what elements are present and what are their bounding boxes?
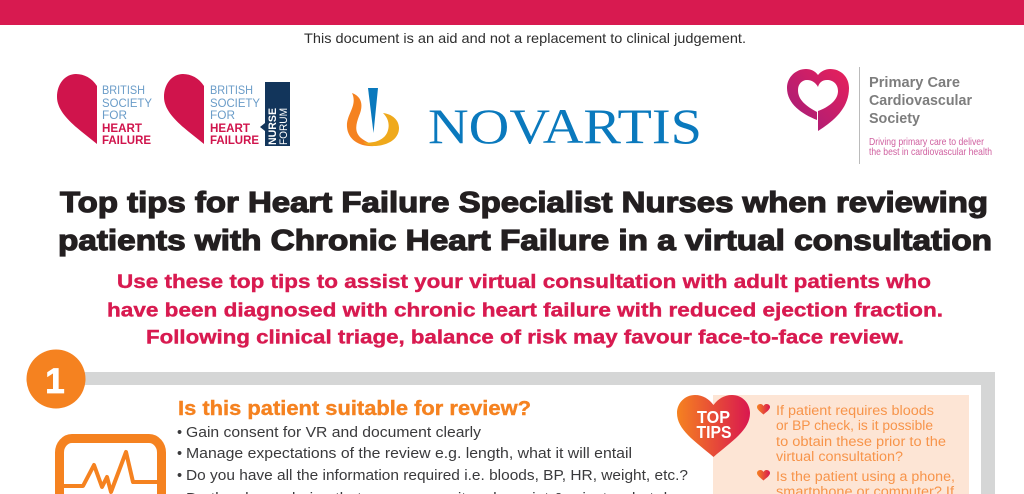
subtitle: Use these top tips to assist your virtual consultation with adult patients who xyxy=(117,271,931,293)
checklist: • xyxy=(177,468,182,484)
icon: top tips heart: TIPS xyxy=(696,422,732,442)
logo: BSH Nurse Forum: BRITISH xyxy=(210,83,253,97)
icon: top tips heart: TOP xyxy=(697,407,730,427)
logo: Primary Care Cardiovascular Society: Cardiovascular xyxy=(869,93,972,109)
panel: step 1 frame xyxy=(56,372,995,494)
checklist: Gain consent for VR and document clearly xyxy=(186,425,482,441)
checklist xyxy=(177,425,688,494)
top tips text: virtual consultation? xyxy=(776,449,903,464)
top tips text: If patient requires bloods xyxy=(776,403,934,418)
top tips text: or BP check, is it possible xyxy=(776,418,933,433)
title: patients with Chronic Heart Failure in a virtual consultation xyxy=(58,225,992,257)
step number badge: 1 xyxy=(45,362,65,401)
heading: step 1: Is this patient suitable for review? xyxy=(178,397,531,420)
logo: BSH Nurse Forum: FORUM xyxy=(278,108,290,145)
logo: BSH Nurse Forum: HEART xyxy=(210,121,251,135)
subtitle xyxy=(107,271,943,348)
logo: Primary Care Cardiovascular Society: Driving primary care to deliver xyxy=(869,136,984,148)
checklist: • xyxy=(177,425,182,441)
logo: Novartis xyxy=(347,88,702,154)
step number badge xyxy=(26,350,86,408)
logo: Primary Care Cardiovascular Society: Primary Care xyxy=(869,75,960,91)
subtitle: Following clinical triage, balance of risk may favour face-to-face review. xyxy=(146,326,904,348)
panel: top tips xyxy=(713,395,969,494)
disclaimer: This document is an aid and not a replacement to clinical judgement. xyxy=(304,30,746,46)
top tips text: to obtain these prior to the xyxy=(776,434,946,449)
logo: BSH Nurse Forum: FAILURE xyxy=(210,133,259,147)
title: Top tips for Heart Failure Specialist Nurses when reviewing xyxy=(60,187,988,219)
logo: British Society for Heart Failure: FAILURE xyxy=(102,133,151,147)
logo: BSH Nurse Forum xyxy=(164,74,290,147)
subtitle: have been diagnosed with chronic heart failure with reduced ejection fraction. xyxy=(107,300,943,322)
checklist: • xyxy=(177,446,182,462)
icon: heart monitor xyxy=(60,438,162,494)
logo: British Society for Heart Failure: FOR xyxy=(102,108,127,122)
checklist: Do you have all the information required i.e. bloods, BP, HR, weight, etc.? xyxy=(186,468,688,484)
logo: BSH Nurse Forum: NURSE xyxy=(267,108,279,145)
icon: top tips heart xyxy=(677,395,750,457)
logo: Primary Care Cardiovascular Society: the best in cardiovascular health xyxy=(869,146,992,158)
logo: British Society for Heart Failure xyxy=(57,74,152,147)
logo: Primary Care Cardiovascular Society xyxy=(787,67,992,164)
checklist: Manage expectations of the review e.g. length, what it will entail xyxy=(186,446,632,462)
top tips text xyxy=(757,403,955,494)
top banner xyxy=(0,0,1024,25)
logo: BSH Nurse Forum: SOCIETY xyxy=(210,96,260,110)
top tips text: Is the patient using a phone, xyxy=(776,469,955,484)
logo: British Society for Heart Failure: BRITISH xyxy=(102,83,145,97)
logo: British Society for Heart Failure: HEART xyxy=(102,121,143,135)
logo: BSH Nurse Forum: FOR xyxy=(210,108,235,122)
logo: British Society for Heart Failure: SOCIETY xyxy=(102,96,152,110)
logo: Primary Care Cardiovascular Society: Society xyxy=(869,111,920,127)
title xyxy=(58,187,992,257)
logo: Novartis: NOVARTIS xyxy=(428,98,702,154)
